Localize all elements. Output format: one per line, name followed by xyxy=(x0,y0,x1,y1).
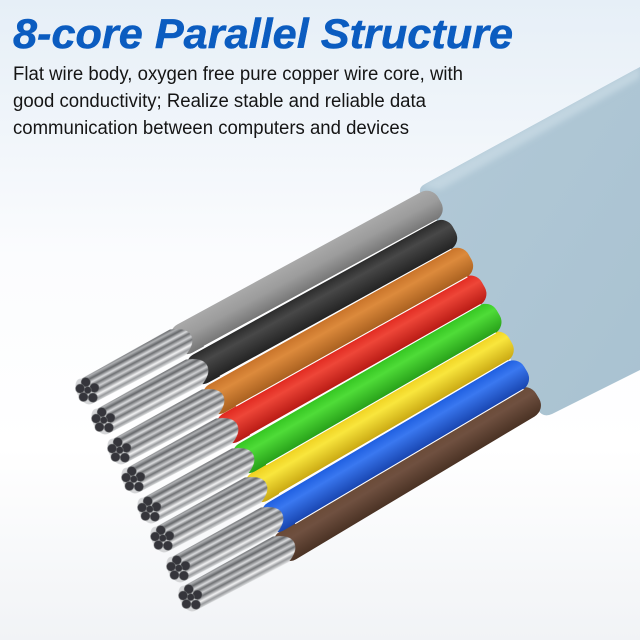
wire 3: orange xyxy=(102,242,478,472)
wire 8: brown xyxy=(172,378,546,622)
description text: good conductivity; Realize stable and reliable data xyxy=(13,91,426,112)
wire 7: blue xyxy=(160,352,534,592)
title: 8-core Parallel Structure xyxy=(13,10,513,57)
wire 1: gray xyxy=(70,186,447,411)
wire 5: green xyxy=(132,296,506,532)
description text: communication between computers and devices xyxy=(13,118,409,139)
wire 2: black xyxy=(86,215,462,441)
wire 4: red xyxy=(116,269,491,501)
wire 6: yellow xyxy=(144,324,519,562)
flat cable jacket xyxy=(420,66,640,415)
description text xyxy=(13,64,463,139)
description text: Flat wire body, oxygen free pure copper wire core, with xyxy=(13,64,463,85)
